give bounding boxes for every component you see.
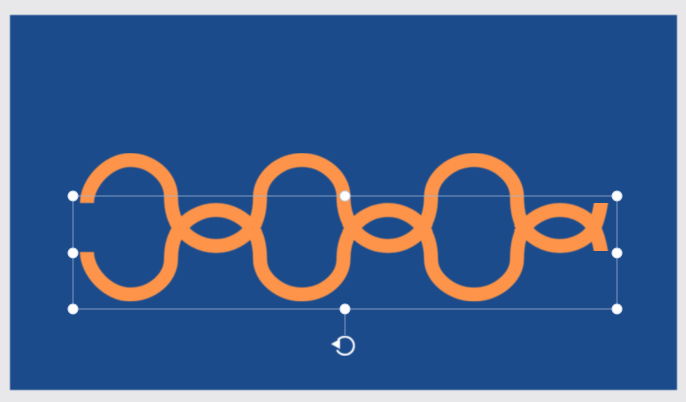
selection handles (68, 191, 622, 314)
icon: rotate handle (331, 337, 354, 355)
selection bounding box (73, 196, 617, 335)
chain of orange interlaced loops (87, 160, 602, 294)
